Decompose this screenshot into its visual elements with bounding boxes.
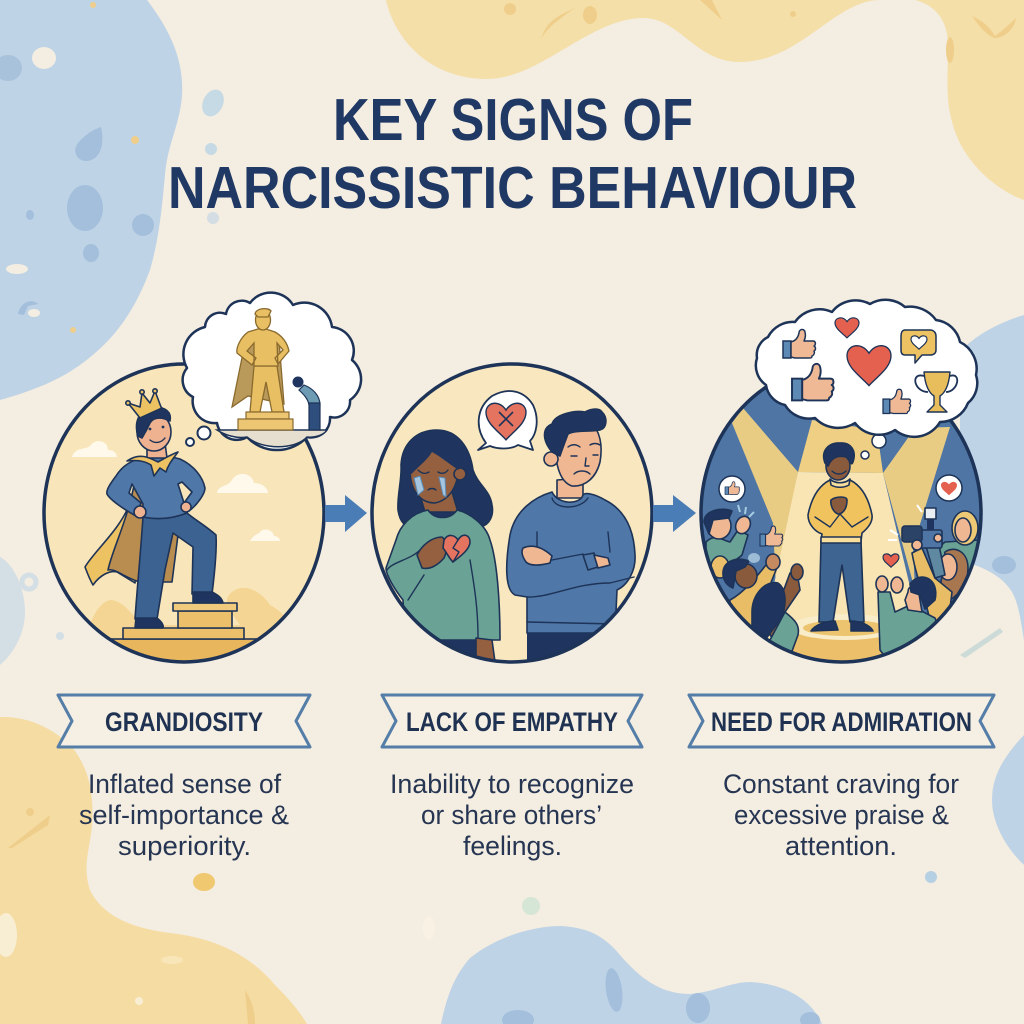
thought bubbles — [186, 426, 210, 446]
figure with crown and cape — [85, 389, 244, 639]
man with arms crossed — [507, 409, 635, 670]
arrow: grandiosity to lack of empathy — [325, 495, 367, 532]
circle outline — [44, 364, 324, 662]
speech bubble with crossed heart — [478, 391, 537, 450]
crowd left — [704, 505, 803, 670]
thought cloud with hearts, thumbs and trophy — [756, 300, 977, 437]
blonde woman — [940, 510, 979, 570]
scene inside circle — [72, 441, 284, 660]
central figure in spotlight — [808, 443, 873, 631]
banner: need for admiration: NEED FOR ADMIRATION — [711, 707, 972, 737]
panel: lack of empathy illustration — [372, 364, 652, 670]
two figures — [386, 409, 635, 670]
circle background — [372, 364, 652, 662]
text: need for admiration description — [723, 769, 959, 861]
text: lack of empathy description: Inability to recognize — [390, 769, 634, 799]
small speech bubbles — [719, 475, 962, 502]
circle background — [701, 364, 981, 662]
text: grandiosity description: Inflated sense of — [88, 769, 281, 799]
banner: lack of empathy: LACK OF EMPATHY — [406, 707, 618, 737]
brown-haired woman with camera — [888, 504, 969, 620]
banner: lack of empathy — [382, 695, 642, 747]
text: grandiosity description: superiority. — [118, 831, 251, 861]
banner: grandiosity — [58, 695, 310, 747]
text: grandiosity description — [79, 769, 289, 861]
text: lack of empathy description: feelings. — [463, 831, 562, 861]
banner: need for admiration — [689, 695, 994, 747]
circle outline — [372, 364, 652, 662]
podium — [793, 614, 882, 660]
woman crying with broken heart — [386, 430, 500, 670]
text: grandiosity description: self-importance & — [79, 800, 289, 830]
circle outline — [701, 364, 981, 662]
panel: need for admiration illustration — [701, 300, 985, 670]
banner: grandiosity: GRANDIOSITY — [105, 707, 263, 737]
clapping man in teal — [875, 575, 937, 654]
title — [168, 87, 857, 221]
text: lack of empathy description — [390, 769, 634, 861]
title: KEY SIGNS OF — [333, 87, 693, 153]
crowd right — [875, 504, 979, 654]
spotlights — [732, 408, 950, 650]
panel: grandiosity illustration — [40, 293, 361, 669]
circle background — [44, 364, 324, 662]
thought bubbles — [861, 434, 886, 459]
text: lack of empathy description: or share others’ — [421, 800, 602, 830]
text: need for admiration description: Constant craving for — [723, 769, 959, 799]
stage scene — [704, 408, 985, 670]
thought cloud with statue — [183, 293, 361, 450]
arrow: lack of empathy to need for admiration — [653, 495, 696, 532]
title: NARCISSISTIC BEHAVIOUR — [168, 155, 857, 221]
text: need for admiration description: excessive praise & — [734, 800, 949, 830]
text: need for admiration description: attention. — [785, 831, 897, 861]
floating heart and thumb in crowd — [760, 526, 899, 567]
